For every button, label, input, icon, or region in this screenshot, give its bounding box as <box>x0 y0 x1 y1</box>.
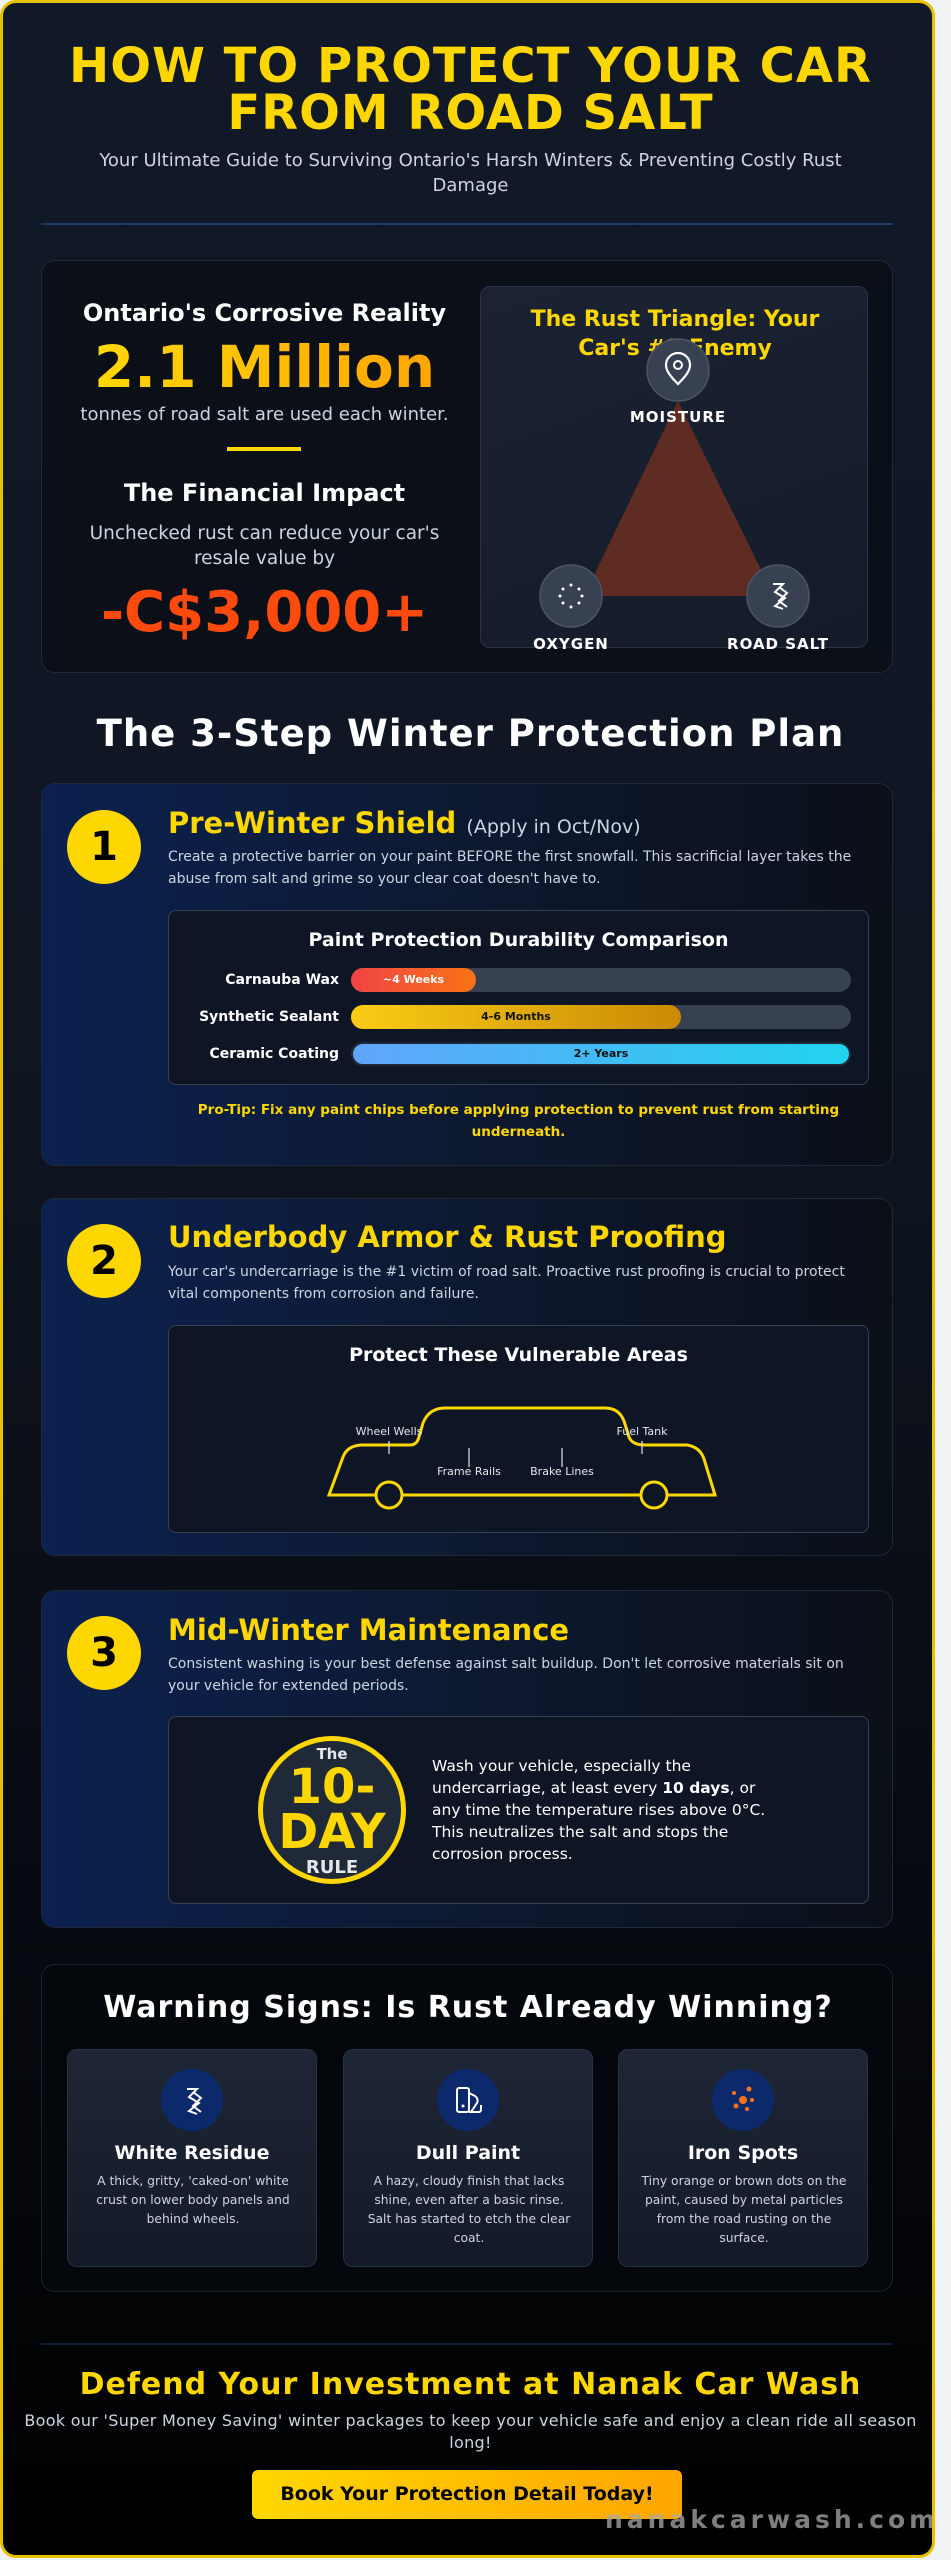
card: iron spots: Iron Spots <box>688 2142 798 2164</box>
card: white residue: A thick, gritty, 'caked-on' white crust on lower body panels and behind wheels. <box>96 2174 290 2226</box>
icon: moisture <box>647 339 709 401</box>
car diagram: Protect These Vulnerable Areas <box>349 1344 688 1366</box>
CTA button: Book Your Protection Detail Today! <box>280 2483 654 2505</box>
badge: 10-day rule: RULE <box>306 1857 358 1878</box>
panel: stats <box>41 260 893 673</box>
badge 1: 1 <box>90 824 118 870</box>
step 1 title: Pre-Winter Shield (Apply in Oct/Nov) <box>168 806 641 840</box>
bar chart: Synthetic Sealant <box>199 1009 339 1025</box>
bar chart: Carnauba Wax <box>225 972 339 988</box>
badge 2: 2 <box>90 1238 118 1284</box>
panel: step 2 <box>41 1198 893 1556</box>
stat: -C$3,000+: -C$3,000+ <box>101 580 428 645</box>
bar chart: 2+ Years <box>574 1047 628 1060</box>
panel: rust triangle <box>480 286 868 648</box>
card: dull paint <box>343 2049 593 2267</box>
text: tonnes: tonnes of road salt are used each winter. <box>80 404 449 425</box>
panel: step 1 <box>41 783 893 1166</box>
bar chart <box>168 910 869 1085</box>
heading: rust triangle: Car's #1 Enemy <box>578 336 772 361</box>
car diagram: Fuel Tank <box>616 1425 668 1438</box>
bar chart: 4-6 Months <box>481 1010 551 1023</box>
title <box>69 38 872 141</box>
step 2 title: Underbody Armor & Rust Proofing <box>168 1220 727 1254</box>
CTA heading: Defend Your Investment at Nanak Car Wash <box>80 2367 861 2402</box>
badge: 10-day rule: 10- <box>289 1759 375 1815</box>
10-day rule box <box>168 1716 869 1904</box>
card: dull paint: Dull Paint <box>416 2142 520 2164</box>
badge 3 <box>67 1616 141 1690</box>
heading: 3-step plan: The 3-Step Winter Protection Plan <box>97 712 844 755</box>
card: iron spots <box>618 2049 868 2267</box>
icon: paint <box>437 2069 499 2131</box>
triangle diagram <box>539 338 810 628</box>
badge: 10-day rule: DAY <box>278 1804 386 1860</box>
card: white residue <box>67 2049 317 2267</box>
bar chart: ~4 Weeks <box>383 973 444 986</box>
heading: warning signs: Warning Signs: Is Rust Already Winning? <box>103 1990 833 2025</box>
heading: corrosive reality: Ontario's Corrosive Reality <box>83 299 446 327</box>
heading: rust triangle: The Rust Triangle: Your <box>531 307 819 332</box>
card: iron spots: Tiny orange or brown dots on the paint, caused by metal particles from the road rusting on the surface. <box>642 2174 846 2245</box>
text: wash rule: Wash your vehicle, especially the undercarriage, at least every 10 days, or any time the temperature rises above 0°C. This neutralizes the salt and stops the corrosion process. <box>432 1757 765 1863</box>
bar chart: Paint Protection Durability Comparison <box>308 929 729 951</box>
badge: 10-day rule: The <box>316 1745 348 1763</box>
badge 2 <box>67 1224 141 1298</box>
text: resale: Unchecked rust can reduce your car's resale value by <box>90 523 439 569</box>
badge 3: 3 <box>90 1630 118 1676</box>
label: moisture: MOISTURE <box>630 408 726 426</box>
car diagram: Frame Rails <box>437 1465 501 1478</box>
bar chart: Ceramic Coating <box>210 1046 339 1062</box>
label: road salt: ROAD SALT <box>727 635 829 653</box>
panel: step 3 <box>41 1590 893 1928</box>
step 2 text: Your car's undercarriage is the #1 victim of road salt. Proactive rust proofing is crucial to protect vital components from corrosion and failure. <box>168 1264 845 1302</box>
icon: spots <box>712 2069 774 2131</box>
label: oxygen: OXYGEN <box>533 635 609 653</box>
CTA button <box>252 2470 682 2519</box>
watermark: nanakcarwash.com <box>605 2505 935 2534</box>
car diagram: Brake Lines <box>530 1465 594 1478</box>
car diagram <box>168 1325 869 1533</box>
title: HOW TO PROTECT YOUR CAR <box>69 38 872 94</box>
title: FROM ROAD SALT <box>227 85 714 141</box>
badge: 10-day rule <box>258 1736 406 1884</box>
icon: oxygen <box>540 565 602 627</box>
step 3 title: Mid-Winter Maintenance <box>168 1613 569 1647</box>
heading: rust triangle <box>530 307 820 361</box>
panel: warning signs <box>41 1964 893 2292</box>
card: dull paint: A hazy, cloudy finish that lacks shine, even after a basic rinse. Salt has started to etch the clear coat. <box>368 2174 570 2245</box>
heading: financial impact: The Financial Impact <box>124 479 405 507</box>
subtitle: Your Ultimate Guide to Surviving Ontario's Harsh Winters & Preventing Costly Rust Damage <box>99 150 842 196</box>
card: white residue: White Residue <box>115 2142 269 2164</box>
car diagram: Wheel Wells <box>356 1425 423 1438</box>
step 3 text: Consistent washing is your best defense against salt buildup. Don't let corrosive materials sit on your vehicle for extended periods. <box>168 1656 844 1694</box>
pro tip: Pro-Tip: Fix any paint chips before applying protection to prevent rust from starting underneath. <box>198 1102 839 1140</box>
icon: road salt <box>747 565 809 627</box>
CTA text: Book our 'Super Money Saving' winter packages to keep your vehicle safe and enjoy a clean ride all season long! <box>24 2411 917 2452</box>
icon: residue <box>161 2069 223 2131</box>
badge 1 <box>67 810 141 884</box>
step 1 text: Create a protective barrier on your paint BEFORE the first snowfall. This sacrificial layer takes the abuse from salt and grime so your clear coat doesn't have to. <box>168 849 851 887</box>
stat: 2.1 million: 2.1 Million <box>94 333 435 401</box>
